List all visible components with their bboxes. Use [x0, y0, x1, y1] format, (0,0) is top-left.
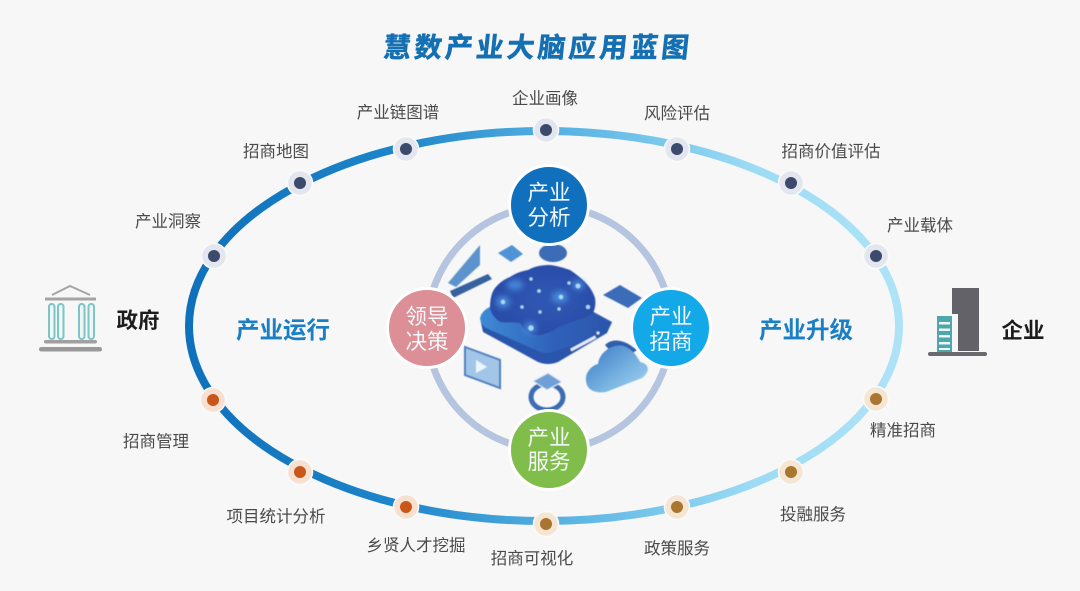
inner ring	[427, 206, 671, 450]
icon: screens top-left	[448, 245, 492, 298]
node labels	[123, 89, 954, 568]
circle: industry services	[510, 410, 588, 490]
icon: government building	[39, 286, 102, 352]
brain	[490, 265, 595, 335]
icon: tablet right	[603, 285, 642, 308]
icon: small chip	[498, 245, 523, 262]
heading: industry operation: 产业运行	[236, 317, 330, 343]
node labels: 产业载体	[887, 216, 954, 235]
node labels: 招商价值评估	[782, 142, 880, 161]
heading: industry upgrade: 产业升级	[759, 317, 853, 343]
top nodes	[202, 118, 888, 268]
central brain illustration	[448, 244, 648, 410]
node labels: 企业画像	[512, 89, 578, 108]
node labels: 政策服务	[644, 539, 710, 558]
circle: investment attraction: 招商	[649, 330, 693, 354]
circle: investment attraction: 产业	[649, 305, 693, 329]
circle: industry services: 服务	[527, 450, 571, 474]
circle: leadership decision	[388, 288, 466, 368]
node labels: 风险评估	[644, 104, 710, 123]
icon: smart watch	[531, 373, 563, 410]
label: enterprise: 企业	[1001, 319, 1045, 343]
node labels: 招商管理	[123, 432, 189, 451]
icon: video panel	[465, 347, 500, 388]
node labels: 招商地图	[243, 142, 309, 161]
circle: investment attraction	[632, 288, 710, 368]
node labels: 投融服务	[780, 505, 846, 524]
bottom nodes left	[200, 388, 418, 520]
circle: industry analysis: 产业	[527, 181, 571, 205]
icon: enterprise building	[928, 288, 987, 356]
icon: cloud	[586, 340, 648, 392]
node labels: 招商可视化	[491, 549, 573, 568]
node labels: 精准招商	[870, 421, 936, 440]
circle: leadership decision: 领导	[405, 305, 449, 329]
outer ellipse ring	[189, 131, 899, 521]
node labels: 产业链图谱	[357, 103, 439, 122]
bottom nodes right	[534, 386, 888, 536]
circle: industry analysis: 分析	[527, 206, 571, 230]
node labels: 项目统计分析	[226, 507, 326, 526]
icon: user badge	[539, 244, 567, 262]
label: government: 政府	[116, 308, 160, 333]
circle: leadership decision: 决策	[405, 330, 449, 354]
circle: industry services: 产业	[527, 426, 571, 450]
title: 慧数产业大脑应用蓝图	[382, 32, 694, 63]
node labels: 产业洞察	[135, 212, 201, 231]
circle: industry analysis	[510, 166, 588, 244]
node labels: 乡贤人才挖掘	[366, 536, 466, 555]
brain platform	[480, 306, 612, 364]
